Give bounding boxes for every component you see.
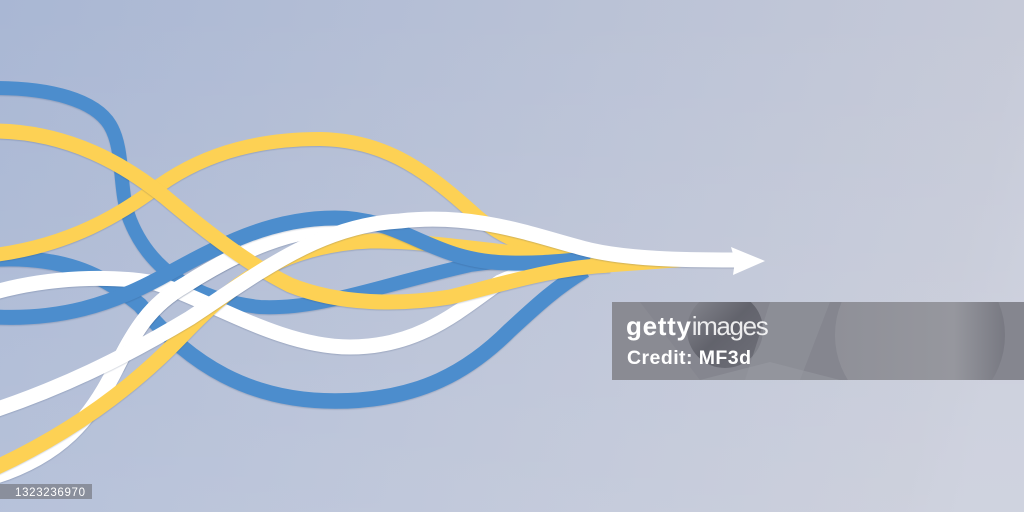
yellow ribbon: descending with tapered tip xyxy=(0,131,682,302)
image id label xyxy=(0,484,92,499)
white ribbon: middle wave xyxy=(0,262,610,347)
white ribbon: bottom rising xyxy=(0,226,352,476)
blue ribbon: middle crest xyxy=(0,218,605,317)
blue ribbon: lower loop xyxy=(0,259,585,401)
blue ribbon: top descending xyxy=(0,88,600,307)
watermark credit: Credit: MF3d xyxy=(627,347,751,369)
image id label: 1323236970 xyxy=(15,487,85,499)
yellow ribbon: upper arc xyxy=(0,139,600,260)
yellow ribbon: bottom rising xyxy=(0,241,600,468)
white arrow ribbon xyxy=(0,219,765,410)
watermark panel xyxy=(612,302,1024,380)
white ribbon: bottom rising, front segment xyxy=(116,245,240,372)
watermark logo: gettyimages xyxy=(626,311,769,341)
arrow head xyxy=(731,247,765,275)
